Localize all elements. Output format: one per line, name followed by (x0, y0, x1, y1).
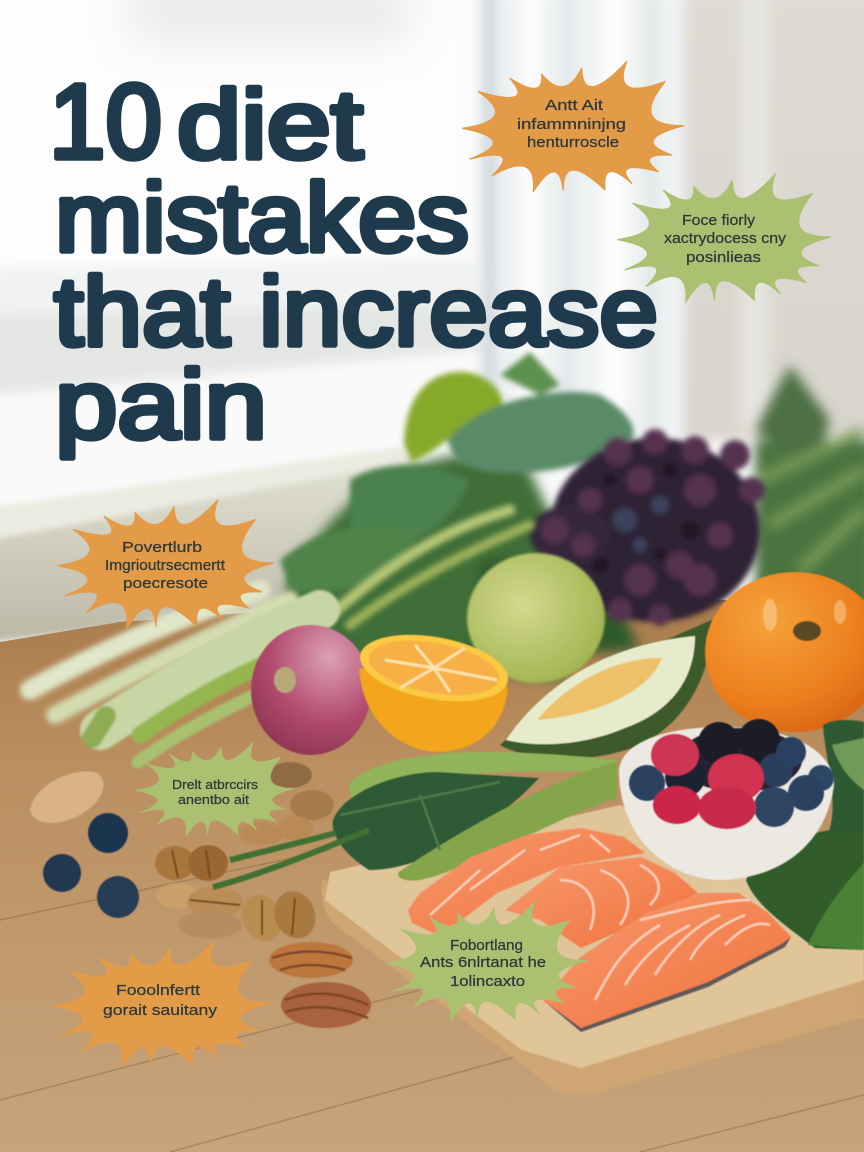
radish (251, 625, 371, 755)
callout: green badge small: anentbo ait (178, 792, 249, 807)
callout: green badge small (136, 743, 294, 836)
bowl (619, 727, 834, 880)
cutting board (322, 805, 864, 1095)
orange tomato (705, 572, 864, 732)
callout: green badge top: posinlieas (686, 249, 761, 266)
callout: green badge bottom (387, 902, 586, 1021)
callout: green badge small: Drelt atbrccirs (172, 777, 259, 792)
callout: orange badge middle: poecresote (123, 575, 208, 592)
callout: orange badge top (463, 62, 684, 192)
back greens: right (755, 365, 864, 610)
curtain (482, 0, 687, 440)
callout: green badge bottom: Ants 6nlrtanat he (420, 954, 546, 971)
berries (629, 719, 834, 829)
callout: orange badge top: infammninjng (517, 116, 626, 133)
callout: orange badge top: Antt Ait (545, 97, 604, 114)
callout: orange badge bottom: gorait sauitany (103, 1002, 218, 1019)
title: pain (55, 350, 267, 459)
walnuts behind badge (240, 762, 334, 845)
title: that increase (54, 257, 658, 366)
callout: orange badge bottom (53, 942, 270, 1066)
leek and spinach centre (213, 752, 617, 887)
callout: green badge bottom: Fobortlang (450, 937, 523, 954)
avocado (500, 620, 712, 759)
green apple (467, 553, 605, 683)
callout: green badge top: xactrydocess cny (664, 230, 787, 247)
callout: orange badge middle: Povertlurb (122, 539, 202, 556)
cashew (30, 771, 104, 823)
callout: orange badge top: henturroscle (527, 134, 619, 151)
callout: orange badge bottom: Fooolnfertt (116, 982, 201, 999)
green mass behind vegetables (285, 450, 640, 680)
callout: green badge top: Foce fiorly (682, 212, 756, 229)
walnut cluster left (156, 883, 243, 939)
callout: orange badge middle: Imgrioutrsecmertt (105, 557, 226, 574)
title (49, 63, 658, 459)
orange half (355, 624, 513, 752)
purple kale (530, 429, 765, 626)
celery stalks (30, 510, 530, 762)
title: diet (177, 70, 363, 179)
wooden table (0, 600, 864, 1152)
walnut upper left (155, 845, 228, 881)
callout: green badge top (618, 174, 830, 302)
right spinach leaves (746, 720, 864, 950)
window glow (0, 0, 490, 320)
window sill (0, 447, 440, 642)
back leaves: spinach (280, 352, 633, 592)
callout: orange badge middle (58, 500, 274, 628)
title: 10 (49, 63, 162, 181)
bowl of berries (619, 719, 834, 880)
wall (684, 0, 864, 440)
window frame band (0, 258, 480, 510)
callout: green badge bottom: 1olincaxto (450, 973, 525, 990)
walnuts (155, 845, 371, 1028)
title: mistakes (55, 163, 469, 272)
salmon fillets (408, 828, 791, 1032)
blueberries on table (43, 813, 139, 918)
walnut right (235, 886, 322, 948)
